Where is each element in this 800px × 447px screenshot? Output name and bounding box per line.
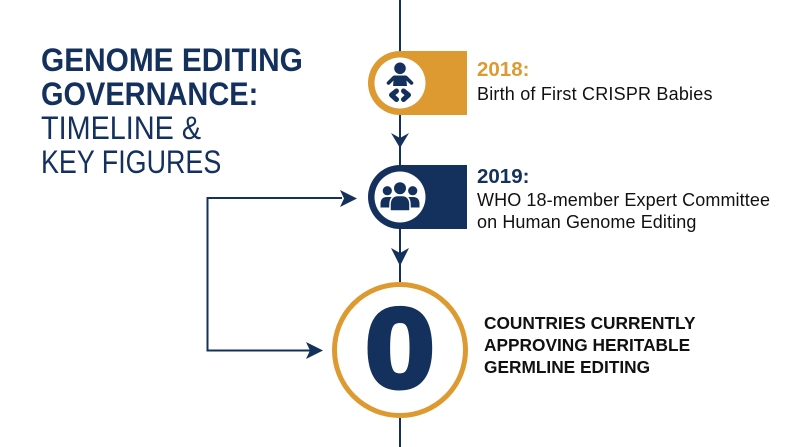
zero description: COUNTRIES CURRENTLY <box>484 312 696 332</box>
2019 description <box>477 190 770 232</box>
icon: baby <box>388 63 412 100</box>
icon: group of people <box>380 182 420 211</box>
2018 label: 2018: <box>477 58 529 81</box>
2019 description: on Human Genome Editing <box>477 212 696 232</box>
title: GENOME EDITING <box>40 42 302 78</box>
2018 pill <box>368 51 467 115</box>
2019 label: 2019: <box>477 164 529 188</box>
title <box>40 42 302 180</box>
feedback arrow connector <box>208 190 357 359</box>
2018 description: Birth of First CRISPR Babies <box>477 84 713 104</box>
zero description: APPROVING HERITABLE <box>484 334 690 354</box>
arrow: 2018 to 2019 <box>391 133 409 148</box>
zero stat circle: 0 <box>365 287 435 412</box>
2019 pill <box>368 165 467 229</box>
arrow: 2019 to zero <box>391 248 409 266</box>
title: GOVERNANCE: <box>40 76 258 112</box>
title: KEY FIGURES <box>40 144 221 180</box>
timeline spine <box>399 0 401 447</box>
zero description <box>484 312 696 376</box>
title: TIMELINE & <box>40 110 201 146</box>
2019 description: WHO 18-member Expert Committee <box>477 190 770 210</box>
zero description: GERMLINE EDITING <box>484 356 650 376</box>
zero stat circle <box>334 284 466 416</box>
